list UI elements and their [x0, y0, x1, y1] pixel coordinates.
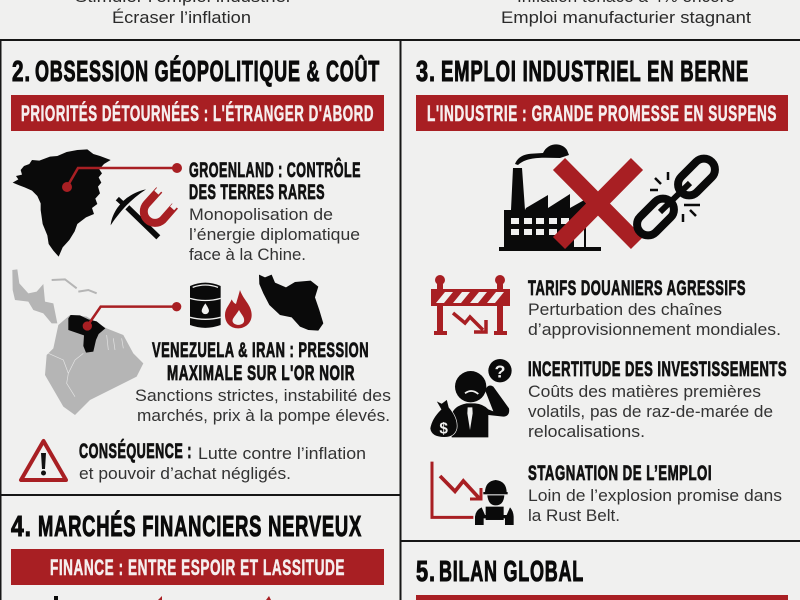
- text: Venezuela et Iran: MAXIMALE SUR L'OR NOIR: [167, 362, 355, 385]
- banner: priorités détournées: [11, 95, 384, 131]
- text: Venezuela et Iran: Sanctions strictes, instabilité des: [135, 386, 391, 405]
- text: conséquence: [79, 440, 366, 483]
- intro text: left column: [75, 0, 290, 27]
- intro text: right column: Emploi manufacturier stagnant: [501, 8, 751, 27]
- icon: worried investor with money bag: [430, 359, 512, 437]
- icon: warning triangle: [21, 441, 66, 480]
- heading: section 5: [416, 556, 584, 588]
- intro text: left column: Écraser l’inflation: [112, 8, 251, 27]
- text: Groenland: face à la Chine.: [189, 245, 306, 264]
- text: incertitude: volatils, pas de raz-de-marée de: [528, 402, 773, 421]
- text: Groenland: Monopolisation de: [189, 205, 333, 224]
- icon: falling chart with worker: [432, 462, 514, 525]
- icon: oil barrel: [190, 283, 221, 328]
- heading: section 4: 4.: [11, 511, 32, 543]
- text: Venezuela et Iran: VENEZUELA & IRAN : PRESSION: [152, 339, 369, 362]
- heading: section 2: OBSESSION GÉOPOLITIQUE & COÛT: [35, 54, 380, 88]
- map: Latin America with Venezuela: [12, 269, 181, 415]
- text: incertitude: [528, 358, 787, 441]
- heading: section 2: 2.: [12, 56, 31, 88]
- map: Greenland: [13, 149, 111, 257]
- heading: section 4: [11, 509, 362, 543]
- icon: flame: [225, 290, 252, 328]
- heading: section 4: MARCHÉS FINANCIERS NERVEUX: [38, 509, 362, 543]
- panel: emploi industriel: [416, 56, 788, 525]
- text: Groenland: GROENLAND : CONTRÔLE: [189, 158, 361, 182]
- panel: géopolitique: [11, 54, 391, 483]
- text: Groenland: l’énergie diplomatique: [189, 225, 360, 244]
- connector: Greenland to label: [62, 163, 182, 192]
- panel: marchés financiers: [11, 509, 384, 600]
- text: conséquence: CONSÉQUENCE :: [79, 440, 192, 463]
- text: stagnation: Loin de l’explosion promise dans: [528, 486, 782, 505]
- map: Iran: [259, 275, 323, 331]
- icons: cropped tops of finance icons: [54, 596, 271, 600]
- text: tarifs douaniers: [528, 277, 781, 339]
- icon: factory crossed out: [499, 144, 637, 251]
- banner: priorités détournées: PRIORITÉS DÉTOURNÉES : L'ÉTRANGER D'ABORD: [21, 101, 374, 126]
- banner: finance: FINANCE : ENTRE ESPOIR ET LASSITUDE: [50, 555, 345, 580]
- icon: worried investor with money bag: ?: [494, 361, 505, 381]
- panel: bilan global: [416, 556, 788, 600]
- icon: worried investor with money bag: $: [439, 420, 448, 437]
- text: Venezuela et Iran: marchés, prix à la pompe élevés.: [137, 406, 390, 425]
- intro text: right column: [501, 0, 751, 27]
- text: stagnation: la Rust Belt.: [528, 506, 620, 525]
- text: stagnation: [528, 462, 782, 525]
- text: incertitude: relocalisations.: [528, 422, 645, 441]
- icon: pickaxe and magnet: [111, 187, 178, 237]
- text: Groenland: DES TERRES RARES: [189, 181, 325, 204]
- text: conséquence: et pouvoir d’achat négligés.: [79, 464, 291, 483]
- text: tarifs douaniers: d’approvisionnement mondiales.: [528, 320, 781, 339]
- icon: broken chain: [633, 154, 719, 240]
- banner: finance: [11, 549, 384, 585]
- text: Groenland: [189, 158, 361, 264]
- icon: road barrier: [431, 275, 510, 335]
- heading: section 3: 3.: [416, 56, 436, 88]
- text: Venezuela et Iran: [135, 339, 391, 425]
- heading: section 5: 5.: [416, 556, 436, 588]
- text: incertitude: Coûts des matières premières: [528, 382, 761, 401]
- text: conséquence: Lutte contre l’inflation: [198, 444, 366, 463]
- text: tarifs douaniers: Perturbation des chaînes: [528, 300, 722, 319]
- banner: bilan, cropped: [416, 595, 788, 600]
- heading: section 5: BILAN GLOBAL: [439, 556, 584, 588]
- heading: section 2: [12, 54, 380, 88]
- banner: industrie: [416, 95, 788, 131]
